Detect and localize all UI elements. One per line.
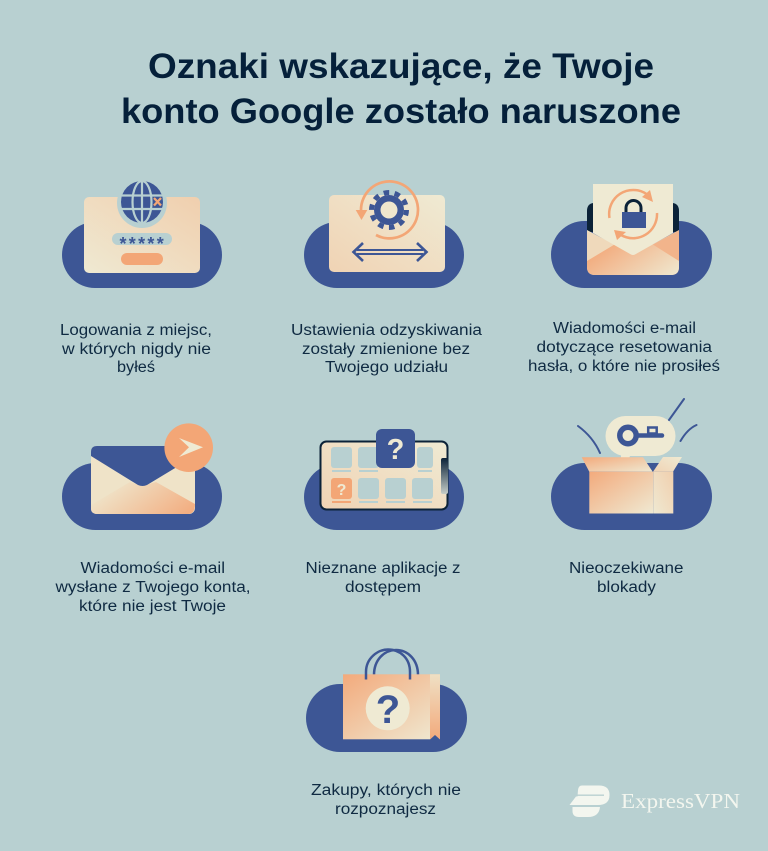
icon: phone with app grid: ? — [387, 434, 404, 466]
icon: shopping bag with question mark — [306, 650, 467, 752]
label — [528, 320, 720, 375]
icon: envelope with lock — [551, 184, 712, 288]
label: które nie jest Twoje — [79, 598, 226, 615]
panel: unrecognized purchases — [306, 650, 467, 818]
label: Zakupy, których nie — [311, 782, 461, 799]
label: byłeś — [117, 359, 155, 376]
panel: emails sent from your account — [54, 423, 250, 615]
panel: recovery settings changed — [291, 181, 482, 376]
label — [291, 322, 482, 376]
title: Oznaki wskazujące, że Twoje — [148, 47, 654, 86]
icon: login card with globe: ***** — [120, 234, 166, 254]
label — [306, 560, 460, 596]
icon: phone with app grid — [304, 429, 464, 530]
panel: logins from unknown places — [60, 178, 222, 376]
label: Wiadomości e-mail — [553, 320, 696, 337]
panel: unexpected lockouts — [551, 399, 712, 596]
panel: unknown apps — [304, 429, 464, 596]
icon: phone with app grid: ? — [337, 482, 346, 499]
label: Wiadomości e-mail — [80, 560, 225, 577]
wordmark: ExpressVPN — [621, 789, 740, 813]
label: rozpoznajesz — [335, 801, 436, 818]
label: wysłane z Twojego konta, — [54, 579, 250, 596]
icon: envelope with send badge — [62, 423, 222, 530]
icon: login card with globe — [62, 178, 222, 288]
panel: password reset emails — [528, 184, 720, 375]
logo: ExpressVPN — [570, 786, 740, 817]
label: Twojego udziału — [325, 359, 448, 376]
label — [60, 322, 212, 376]
label: dotyczące resetowania — [536, 339, 712, 356]
label: Nieoczekiwane — [569, 560, 684, 577]
icon: ExpressVPN mark — [570, 786, 610, 817]
icon: open box with key bubble — [551, 399, 712, 530]
label: Nieznane aplikacje z — [306, 560, 460, 577]
label — [54, 560, 250, 615]
label — [311, 782, 461, 818]
title — [121, 47, 681, 131]
label: blokady — [597, 579, 656, 596]
label: dostępem — [345, 579, 421, 596]
label: w których nigdy nie — [61, 341, 211, 358]
label: hasła, o które nie prosiłeś — [528, 358, 720, 375]
label — [569, 560, 684, 596]
label: Ustawienia odzyskiwania — [291, 322, 482, 339]
icon: shopping bag with question mark: ? — [376, 688, 400, 732]
label: zostały zmienione bez — [302, 341, 470, 358]
label: Logowania z miejsc, — [60, 322, 212, 339]
icon: settings card with gear — [304, 181, 464, 288]
title: konto Google zostało naruszone — [121, 92, 681, 131]
